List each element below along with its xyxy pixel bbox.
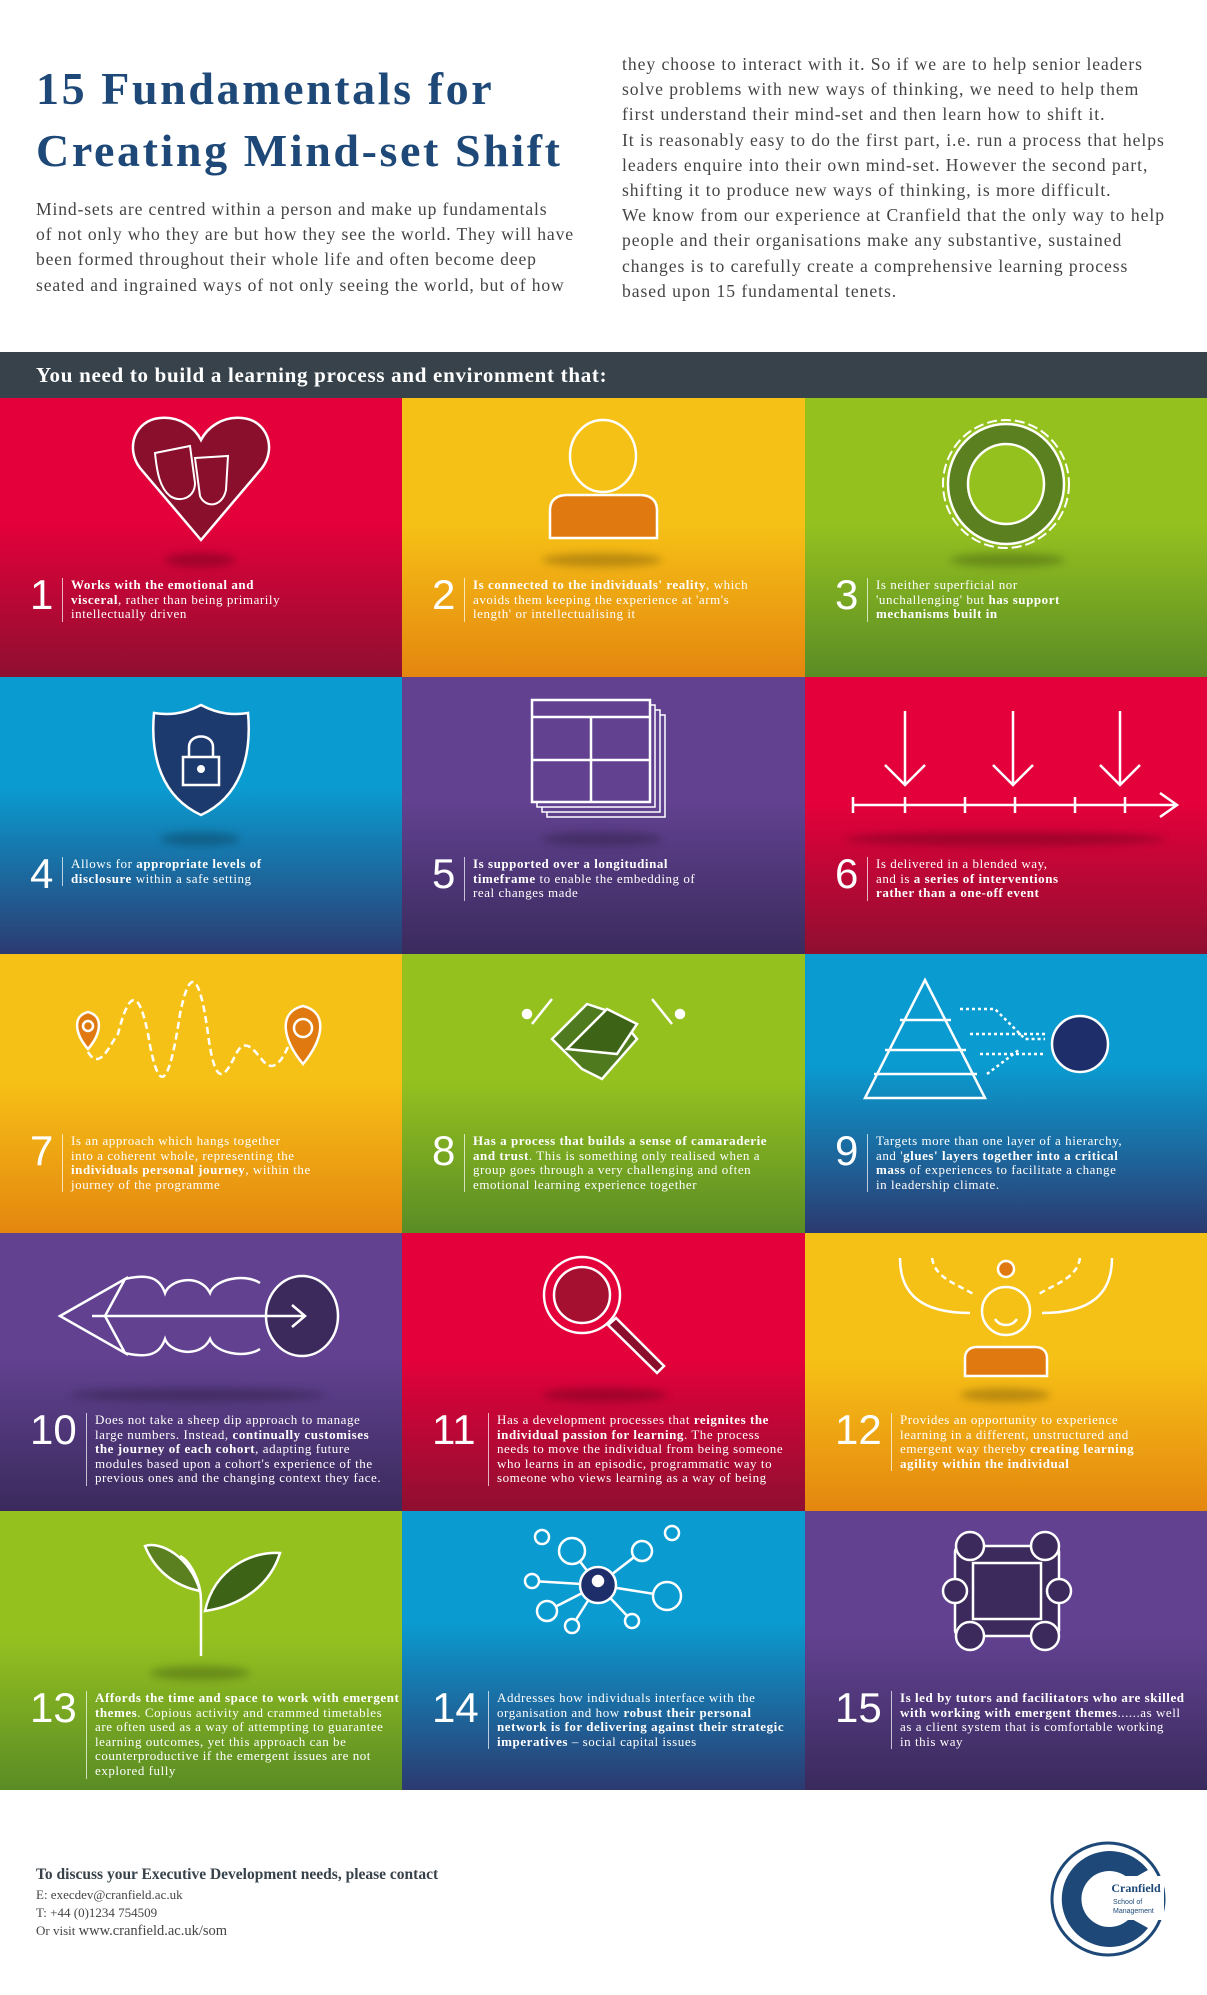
tile 10: Does not take a sheep dip approach to manage bbox=[95, 1412, 360, 1427]
title: Creating Mind-set Shift bbox=[36, 125, 563, 176]
intro text right: they choose to interact with it. So if we are to help senior leaders bbox=[622, 54, 1143, 74]
tile 9: 9 bbox=[835, 1127, 858, 1174]
tile 12: learning in a different, unstructured and bbox=[900, 1427, 1129, 1442]
tile 15: as a client system that is comfortable working bbox=[900, 1719, 1164, 1734]
icon: wavy journey pins bbox=[76, 980, 322, 1078]
tile 13: 13 bbox=[30, 1684, 77, 1731]
tile 11: individual passion for learning. The process bbox=[497, 1427, 760, 1442]
intro text right: changes is to carefully create a comprehensive learning process bbox=[622, 256, 1128, 276]
tile 9: Targets more than one layer of a hierarchy, bbox=[876, 1133, 1122, 1148]
tile 2: Is connected to the individuals' reality, which bbox=[473, 577, 748, 592]
icon: magnifier globe bbox=[542, 1256, 666, 1375]
tile 6: Is delivered in a blended way, bbox=[876, 856, 1048, 871]
tile 15: in this way bbox=[900, 1734, 963, 1749]
tile 6: 6 bbox=[835, 850, 858, 897]
icon: shield padlock bbox=[152, 704, 250, 816]
tile 10: modules based upon a cohort's experience of the bbox=[95, 1456, 373, 1471]
intro text right: shifting it to produce new ways of thinking, is more difficult. bbox=[622, 180, 1112, 200]
tile 9: in leadership climate. bbox=[876, 1177, 1000, 1192]
tile 12: Provides an opportunity to experience bbox=[900, 1412, 1118, 1427]
intro text left: Mind-sets are centred within a person and make up fundamentals bbox=[36, 199, 547, 219]
tile 2: avoids them keeping the experience at 'arm's bbox=[473, 592, 729, 607]
tile 15: Is led by tutors and facilitators who are skilled bbox=[900, 1690, 1185, 1705]
tile 11: someone who views learning as a way of being bbox=[497, 1470, 767, 1485]
tile 6: rather than a one-off event bbox=[876, 885, 1039, 900]
intro text right: solve problems with new ways of thinking, we need to help them bbox=[622, 79, 1139, 99]
tile 5: real changes made bbox=[473, 885, 578, 900]
tile 7 bbox=[0, 954, 403, 1233]
intro text left bbox=[36, 199, 574, 295]
tile 10: 10 bbox=[30, 1406, 77, 1453]
tile 4: Allows for appropriate levels of bbox=[71, 856, 262, 871]
tile 12: 12 bbox=[835, 1406, 882, 1453]
tile 6: and is a series of interventions bbox=[876, 871, 1059, 886]
tile 7: individuals personal journey, within the bbox=[71, 1162, 311, 1177]
icon: arrow feather bbox=[58, 1274, 340, 1358]
intro text right: leaders enquire into their own mind-set. However the second part, bbox=[622, 155, 1148, 175]
tile 7: 7 bbox=[30, 1127, 53, 1174]
section heading bar: You need to build a learning process and environment that: bbox=[36, 363, 607, 387]
tile 2: length' or intellectualising it bbox=[473, 606, 636, 621]
icon: calendar pages bbox=[530, 698, 666, 818]
tile 8 bbox=[402, 954, 805, 1233]
tile 10: the journey of each cohort, adapting future bbox=[95, 1441, 350, 1456]
tile 10: previous ones and the changing context they face. bbox=[95, 1470, 381, 1485]
tile 6 bbox=[805, 677, 1207, 956]
tile 15: 15 bbox=[835, 1684, 882, 1731]
tile 7: into a coherent whole, representing the bbox=[71, 1148, 295, 1163]
tile 13: learning outcomes, yet this approach can be bbox=[95, 1734, 346, 1749]
tile 12 bbox=[805, 1233, 1207, 1512]
tile 14: organisation and how robust their personal bbox=[497, 1705, 752, 1720]
tile 7: Is an approach which hangs together bbox=[71, 1133, 280, 1148]
icon: person with idea arrows bbox=[898, 1258, 1114, 1378]
tile 9: and 'glues' layers together into a critical bbox=[876, 1148, 1118, 1163]
tile 11: 11 bbox=[432, 1406, 476, 1453]
icon: handshake bbox=[522, 998, 686, 1080]
tile 14: 14 bbox=[432, 1684, 479, 1731]
footer contact bbox=[36, 1866, 438, 1939]
intro text left: seated and ingrained ways of not only seeing the world, but of how bbox=[36, 275, 565, 295]
intro text right: based upon 15 fundamental tenets. bbox=[622, 281, 897, 301]
tile 3 bbox=[805, 398, 1207, 677]
footer contact: To discuss your Executive Development needs, please contact bbox=[36, 1866, 438, 1883]
tile 13: themes. Copious activity and crammed timetables bbox=[95, 1705, 382, 1720]
tile 8: emotional learning experience together bbox=[473, 1177, 697, 1192]
tile 13: are often used as a way of attempting to guarantee bbox=[95, 1719, 383, 1734]
logo: Management bbox=[1113, 1908, 1154, 1915]
tile 5: Is supported over a longitudinal bbox=[473, 856, 668, 871]
intro text right: first understand their mind-set and then learn how to shift it. bbox=[622, 104, 1105, 124]
logo bbox=[1050, 1842, 1166, 1956]
footer contact: T: +44 (0)1234 754509 bbox=[36, 1905, 157, 1920]
tile 11: who learns in an episodic, programmatic way to bbox=[497, 1456, 772, 1471]
tile 1: visceral, rather than being primarily bbox=[71, 592, 280, 607]
footer contact: Or visit www.cranfield.ac.uk/som bbox=[36, 1923, 227, 1939]
intro text right: people and their organisations make any substantive, sustained bbox=[622, 230, 1122, 250]
tile 7: journey of the programme bbox=[71, 1177, 220, 1192]
tile 4: 4 bbox=[30, 850, 53, 897]
icon: people circle bbox=[942, 1530, 1072, 1652]
tile 13: counterproductive if the emergent issues are not bbox=[95, 1748, 371, 1763]
tile 13 bbox=[0, 1511, 403, 1790]
tile 14: Addresses how individuals interface with the bbox=[497, 1690, 756, 1705]
intro text left: of not only who they are but how they see the world. They will have bbox=[36, 224, 574, 244]
tile 13: Affords the time and space to work with emergent bbox=[95, 1690, 399, 1705]
tile 3: 'unchallenging' but has support bbox=[876, 592, 1060, 607]
icon: lifebuoy bbox=[942, 419, 1070, 549]
tile 2: 2 bbox=[432, 571, 455, 618]
footer contact: E: execdev@cranfield.ac.uk bbox=[36, 1887, 183, 1902]
icon: seedling bbox=[143, 1544, 282, 1656]
tile 8: and trust. This is something only realised when a bbox=[473, 1148, 760, 1163]
tile 11: Has a development processes that reignites the bbox=[497, 1412, 769, 1427]
section heading bar bbox=[0, 352, 1207, 398]
tile 10 bbox=[0, 1233, 403, 1512]
tile 15 bbox=[805, 1511, 1207, 1790]
icon: heart with masks bbox=[132, 416, 270, 542]
intro text right: It is reasonably easy to do the first part, i.e. run a process that helps bbox=[622, 130, 1165, 150]
logo: School of bbox=[1113, 1899, 1142, 1906]
tile 3: mechanisms built in bbox=[876, 606, 998, 621]
logo: Cranfield bbox=[1111, 1881, 1161, 1895]
intro text left: been formed throughout their whole life and often become deep bbox=[36, 249, 537, 269]
tile 9 bbox=[805, 954, 1207, 1233]
tile 11 bbox=[402, 1233, 805, 1512]
tile 1: 1 bbox=[30, 571, 53, 618]
tile 10: large numbers. Instead, continually customises bbox=[95, 1427, 369, 1442]
tile 1 bbox=[0, 398, 403, 677]
tile 8: group goes through a very challenging and often bbox=[473, 1162, 751, 1177]
tile 15: with working with emergent themes......as well bbox=[900, 1705, 1181, 1720]
tile 5: 5 bbox=[432, 850, 455, 897]
icon: person bbox=[548, 418, 658, 540]
tile 3: Is neither superficial nor bbox=[876, 577, 1018, 592]
tile 4 bbox=[0, 677, 403, 956]
tile 12: emergent way thereby creating learning bbox=[900, 1441, 1134, 1456]
tile 3: 3 bbox=[835, 571, 858, 618]
tile 2 bbox=[402, 398, 805, 677]
tile 4: disclosure within a safe setting bbox=[71, 871, 252, 886]
tile 9: mass of experiences to facilitate a change bbox=[876, 1162, 1116, 1177]
tile 8: 8 bbox=[432, 1127, 455, 1174]
title: 15 Fundamentals for bbox=[36, 63, 494, 114]
icon: network bbox=[524, 1524, 682, 1634]
tile 14: imperatives – social capital issues bbox=[497, 1734, 697, 1749]
intro text right bbox=[622, 54, 1165, 301]
icon: pyramid and circle bbox=[863, 977, 1110, 1100]
tile 12: agility within the individual bbox=[900, 1456, 1069, 1471]
icon: timeline arrows bbox=[852, 711, 1179, 818]
tile 14: network is for delivering against their strategic bbox=[497, 1719, 784, 1734]
tile 14 bbox=[402, 1511, 805, 1790]
tile 1: intellectually driven bbox=[71, 606, 187, 621]
tile 5 bbox=[402, 677, 805, 956]
intro text right: We know from our experience at Cranfield that the only way to help bbox=[622, 205, 1165, 225]
title bbox=[36, 63, 563, 176]
tile 13: explored fully bbox=[95, 1763, 176, 1778]
tile 1: Works with the emotional and bbox=[71, 577, 254, 592]
tile 5: timeframe to enable the embedding of bbox=[473, 871, 695, 886]
tile 8: Has a process that builds a sense of camaraderie bbox=[473, 1133, 767, 1148]
tile 11: needs to move the individual from being someone bbox=[497, 1441, 783, 1456]
